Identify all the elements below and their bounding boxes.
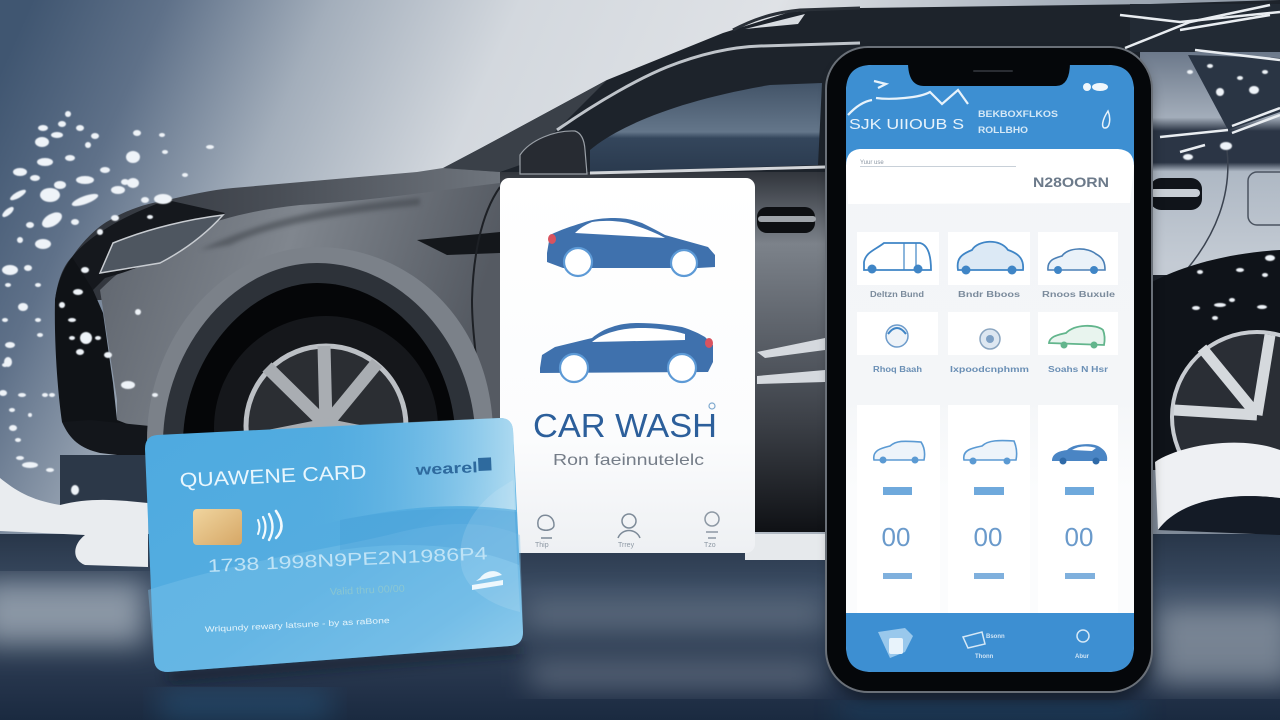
icon: blue car facing right xyxy=(540,323,713,382)
package column 3 xyxy=(1038,405,1118,613)
van icon xyxy=(864,243,931,270)
package column 2: 00 xyxy=(974,522,1002,552)
water droplet accent xyxy=(709,403,715,409)
icon: status weather xyxy=(1083,83,1108,91)
tail light xyxy=(548,234,556,244)
windows xyxy=(575,221,665,238)
card body xyxy=(145,418,523,672)
nav captions: Bsonn xyxy=(986,634,1005,640)
floor reflection streaks xyxy=(0,582,1280,688)
A pillar xyxy=(443,80,607,172)
icon: centre service xyxy=(618,514,640,538)
front bumper lower xyxy=(62,420,170,460)
package column 1 xyxy=(857,405,940,613)
tile captions row 2: Rhoq Baah xyxy=(873,365,922,374)
windows xyxy=(592,328,685,342)
wheels xyxy=(560,354,588,382)
balance card xyxy=(846,149,1134,204)
front rim xyxy=(246,346,406,506)
rear white streaks xyxy=(1120,5,1280,152)
snow foam: left ground xyxy=(0,478,148,567)
nav captions: Thonn xyxy=(975,654,994,660)
tile captions row 1: Bndr Bboos xyxy=(958,290,1021,299)
balance label: Yuur use xyxy=(860,160,884,166)
tail light xyxy=(705,338,713,348)
sign board xyxy=(500,178,755,553)
icon: right service xyxy=(705,512,719,538)
service captions xyxy=(535,542,716,549)
wheel arch outer band xyxy=(147,247,493,440)
card middle band xyxy=(340,509,519,565)
rear wheel arch xyxy=(1152,250,1280,470)
snow foam: centre ground xyxy=(745,534,827,560)
floor: wet reflective ground xyxy=(0,534,1280,720)
app header xyxy=(846,65,1134,165)
header info: ROLLBHO xyxy=(978,125,1028,135)
front tyre xyxy=(214,316,438,540)
mirror xyxy=(520,131,587,174)
hood and front body xyxy=(55,168,500,300)
header info xyxy=(978,109,1058,135)
phone frame xyxy=(826,47,1152,692)
service tile 5 xyxy=(948,312,1030,355)
service captions: Tzo xyxy=(704,542,716,549)
side vent xyxy=(417,232,500,255)
phone shadow xyxy=(830,55,1152,700)
service tile 3 xyxy=(1038,232,1118,285)
card number: 1738 1998N9PE2N1986P4 xyxy=(207,543,488,576)
front rim spokes xyxy=(250,346,402,440)
tile captions row 1: Deltzn Bund xyxy=(870,290,924,299)
package column 1: 00 xyxy=(882,522,910,552)
service tile 6 xyxy=(1038,312,1118,355)
door handle xyxy=(757,207,816,233)
notch xyxy=(908,62,1070,86)
window chrome xyxy=(557,43,860,130)
black grille side xyxy=(55,257,143,458)
rear side panel xyxy=(1140,50,1280,275)
front side window xyxy=(590,83,822,172)
service captions: Thip xyxy=(535,542,549,549)
illustration: dark SUV xyxy=(55,0,1280,540)
nav icon: card xyxy=(878,628,913,658)
card top sheen xyxy=(300,418,516,530)
panel: smartphone xyxy=(826,47,1152,700)
card shadow xyxy=(165,645,520,682)
roof rail xyxy=(733,8,860,30)
nav captions xyxy=(975,634,1090,660)
service captions: Trrey xyxy=(618,542,635,549)
nav captions: Abur xyxy=(1075,654,1090,660)
balance amount: N28OORN xyxy=(1033,174,1109,190)
dark rear sill xyxy=(1158,496,1280,535)
service tile 4 xyxy=(857,312,938,355)
upper cabin and roof silhouette xyxy=(440,0,1280,300)
rear quarter window xyxy=(1188,55,1280,130)
card expiry: Valid thru 00/00 xyxy=(330,584,406,598)
card title: QUAWENE CARD xyxy=(179,462,367,492)
package column 2 xyxy=(948,405,1030,613)
service tile 2 xyxy=(948,232,1030,285)
tile captions row 1 xyxy=(870,290,1116,299)
nav icon: car xyxy=(963,632,985,648)
icon: blue car facing left xyxy=(547,218,715,276)
service tile 1 xyxy=(857,232,939,285)
icon: left service xyxy=(538,515,554,538)
header info: BEKBOXFLKOS xyxy=(978,109,1058,119)
rear top streaks xyxy=(1130,4,1280,52)
heading: car wash: CAR WASH xyxy=(533,407,717,444)
wheels xyxy=(564,248,592,276)
panel: wash card xyxy=(145,418,523,672)
door shell lower xyxy=(480,172,830,532)
package column 3: 00 xyxy=(1065,522,1093,552)
app bottom navigation xyxy=(846,613,1134,672)
subtitle: Ron faeinnutelelc xyxy=(553,452,704,469)
rear door handle xyxy=(1150,178,1202,210)
card fine print: Wrlqundy rewary latsune - by as raBone xyxy=(205,616,391,634)
card brand mark xyxy=(478,457,492,471)
fender crease shadow xyxy=(200,198,420,250)
panel: car wash sign xyxy=(500,178,755,553)
nav icon: card highlight xyxy=(889,638,903,654)
icon: water drop xyxy=(1103,111,1110,128)
tile captions row 2: Soahs N Hsr xyxy=(1048,365,1108,374)
snow foam: right ground xyxy=(1155,443,1280,530)
window sill chrome xyxy=(590,167,825,173)
contactless symbol xyxy=(258,511,282,540)
wheel arch dark band xyxy=(163,263,475,440)
card lower wave xyxy=(148,524,523,672)
under car shadow xyxy=(60,455,150,505)
rear rim spokes xyxy=(1174,335,1270,415)
rear rim xyxy=(1172,332,1280,502)
tile captions row 1: Rnoos Buxule xyxy=(1042,290,1116,299)
balance underline xyxy=(860,166,1016,167)
header title: SJK UIIOUB S xyxy=(849,116,964,133)
card translucent circle xyxy=(460,480,520,612)
water splash particles xyxy=(0,64,1275,495)
rear door line xyxy=(1188,150,1228,268)
sill reflection xyxy=(757,338,825,384)
headlight lens xyxy=(100,215,223,273)
blue floor glow under phone xyxy=(840,702,1140,720)
card car emblem xyxy=(472,571,503,590)
gold chip xyxy=(193,509,242,545)
card brand: wearel xyxy=(414,459,478,479)
door shut line xyxy=(472,187,500,420)
screen xyxy=(846,65,1134,672)
fuel flap xyxy=(1248,172,1280,225)
wheel well xyxy=(183,283,455,440)
tile captions row 2: Ixpoodcnphmm xyxy=(950,365,1029,374)
nav icon: profile xyxy=(1077,630,1089,642)
header car sketch xyxy=(848,81,968,115)
blue floor glow under card xyxy=(160,690,330,720)
front fender xyxy=(100,183,500,440)
speaker xyxy=(973,70,1013,72)
tile captions row 2 xyxy=(873,365,1108,374)
headlight surround xyxy=(72,200,225,290)
roof rail light xyxy=(745,14,805,29)
